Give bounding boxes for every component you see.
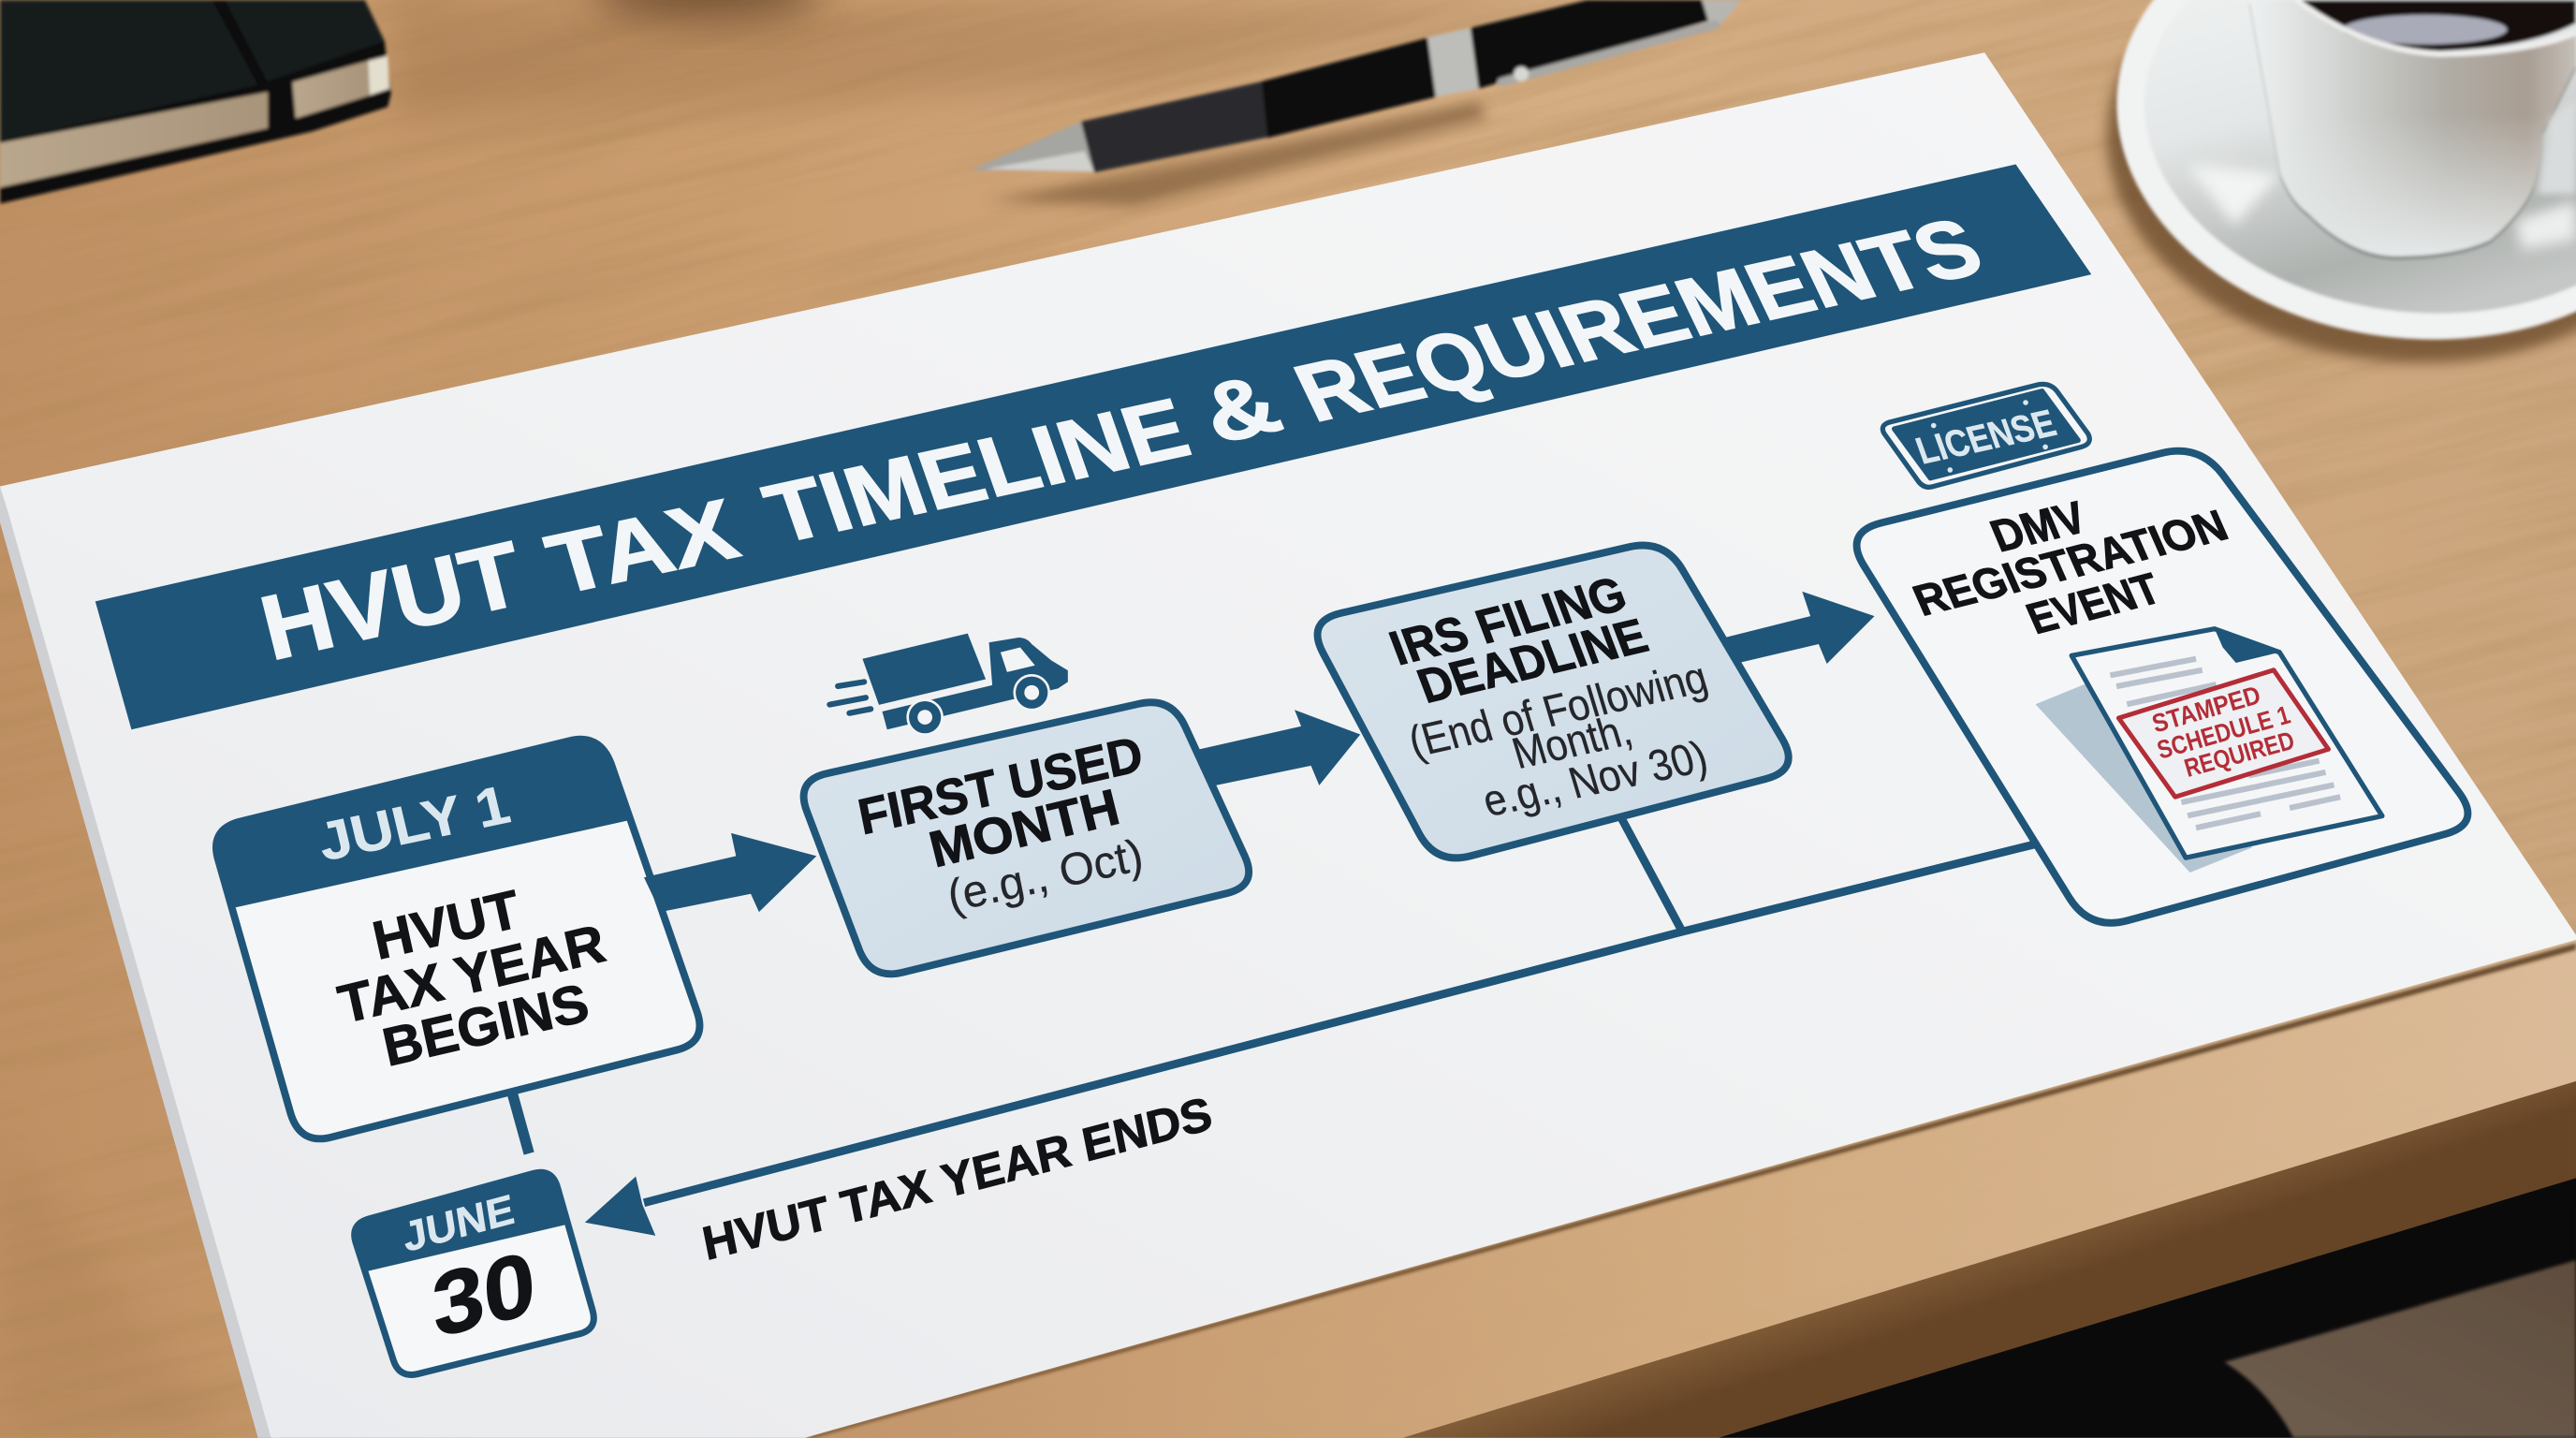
title text (251, 200, 1996, 680)
box text (854, 726, 1148, 922)
connector: July box to June calendar (513, 1094, 529, 1153)
calendar: June 30 (355, 1172, 593, 1374)
date: July 1: JULY 1 (313, 775, 516, 873)
box text: DEADLINE (1410, 608, 1655, 713)
box text: Month, (1506, 704, 1637, 778)
box text: IRS FILING (1383, 565, 1633, 675)
icon: document with stamp (2071, 629, 2382, 858)
box text: (End of Following (1403, 653, 1713, 768)
box text: e.g., Nov 30) (1477, 731, 1713, 826)
arrow: July 1 to first used month (644, 833, 816, 912)
panel: July 1 tax year begins (216, 740, 699, 1138)
label: HVUT tax year ends: HVUT TAX YEAR ENDS (698, 1086, 1216, 1270)
box text (333, 879, 610, 1078)
title text: TAX (536, 482, 748, 613)
box text: MONTH (924, 779, 1125, 878)
box text: EVENT (2019, 564, 2168, 643)
title banner (95, 165, 2091, 729)
notebook (0, 0, 391, 204)
arrow: back to June 30 (585, 1177, 655, 1236)
stamp: Stamped Schedule 1 Required: SCHEDULE 1 (2154, 700, 2293, 765)
icon: license plate (1882, 384, 2089, 487)
box text: BEGINS (377, 973, 594, 1078)
under-desk dark area (1719, 1178, 2576, 1438)
icon: delivery truck (829, 634, 1068, 735)
panel: DMV registration event (1857, 451, 2467, 923)
month: JUNE (400, 1185, 518, 1261)
panel: IRS filing deadline (1318, 545, 1789, 858)
stamp: Stamped Schedule 1 Required: STAMPED (2148, 680, 2263, 739)
icon: license plate: LICENSE (1910, 402, 2061, 472)
arrow: first used month to IRS deadline (1199, 710, 1360, 785)
box text: HVUT (368, 879, 525, 972)
title text: HVUT (251, 522, 533, 680)
connector: year-end line to DMV box (644, 818, 2034, 1203)
title text: REQUIREMENTS (1281, 200, 1996, 439)
day: 30 (429, 1233, 539, 1357)
box text: FIRST USED (854, 726, 1148, 845)
box text: (e.g., Oct) (944, 829, 1147, 922)
stamp: Stamped Schedule 1 Required: REQUIRED (2181, 726, 2298, 783)
document shadow (2036, 683, 2252, 873)
desk front edge (805, 936, 2576, 1438)
arrow: IRS deadline to DMV event (1725, 592, 1875, 664)
coffee cup and saucer (2086, 0, 2576, 391)
box text (1383, 565, 1713, 826)
title text: TIMELINE (754, 380, 1200, 561)
title text: & (1188, 357, 1294, 461)
stamp: Stamped Schedule 1 Required (2118, 670, 2328, 797)
box text: TAX YEAR (333, 914, 610, 1035)
pen (971, 0, 1741, 205)
panel: first used month (804, 702, 1249, 974)
box text: DMV (1983, 492, 2094, 562)
box text: REGISTRATION (1906, 501, 2235, 625)
